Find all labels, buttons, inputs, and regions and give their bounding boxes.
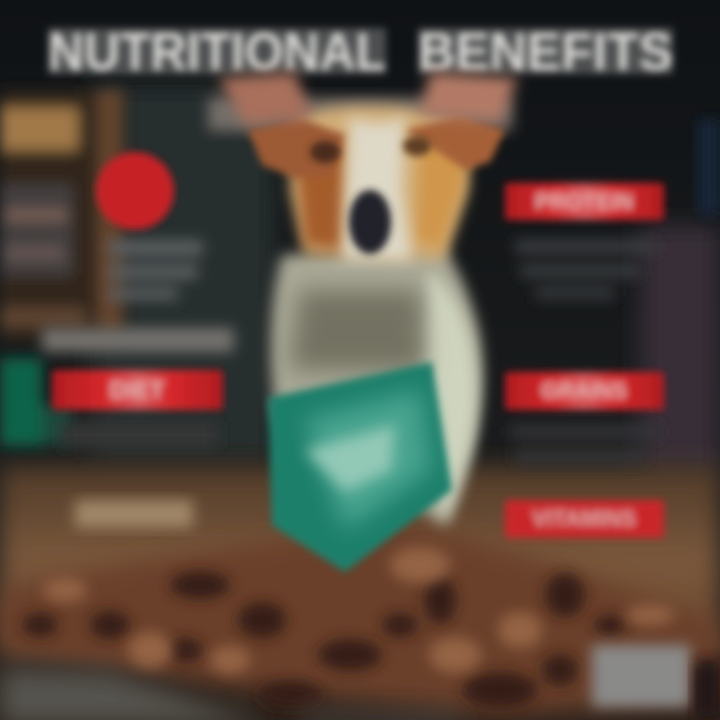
eyes	[310, 141, 340, 163]
red circle badge	[96, 152, 174, 230]
left red banner	[52, 370, 223, 410]
nose	[349, 190, 391, 254]
wooden floor	[0, 465, 720, 655]
subtitle	[208, 97, 513, 131]
product box bottom right	[592, 645, 720, 720]
title: NUTRITIONAL	[48, 22, 386, 82]
kibble pile	[0, 520, 720, 715]
left panel: badge and text	[42, 152, 234, 528]
left lower text	[62, 422, 217, 448]
left red banner: DIET	[110, 377, 165, 404]
title	[48, 22, 673, 82]
right red banner 1	[505, 183, 664, 220]
right text 2	[510, 425, 660, 464]
right red banner 2	[505, 372, 664, 410]
right red banner 2: GRAINS	[541, 378, 627, 403]
right red banner 1: PROTEIN	[535, 189, 633, 214]
right red banner 3	[505, 500, 664, 538]
ear left	[248, 118, 345, 178]
bottom floor	[0, 668, 460, 720]
ear right	[405, 115, 505, 170]
dog	[218, 72, 518, 572]
left shelf	[0, 90, 125, 446]
dog head	[218, 72, 518, 260]
left floor label	[75, 500, 193, 528]
title: BENEFITS	[418, 22, 673, 82]
right red banner 3: VITAMINS	[532, 506, 636, 531]
right panel	[505, 183, 664, 538]
green bandana	[268, 362, 452, 572]
left text block	[42, 240, 234, 352]
right text 1	[515, 240, 655, 298]
dog body	[271, 245, 482, 525]
